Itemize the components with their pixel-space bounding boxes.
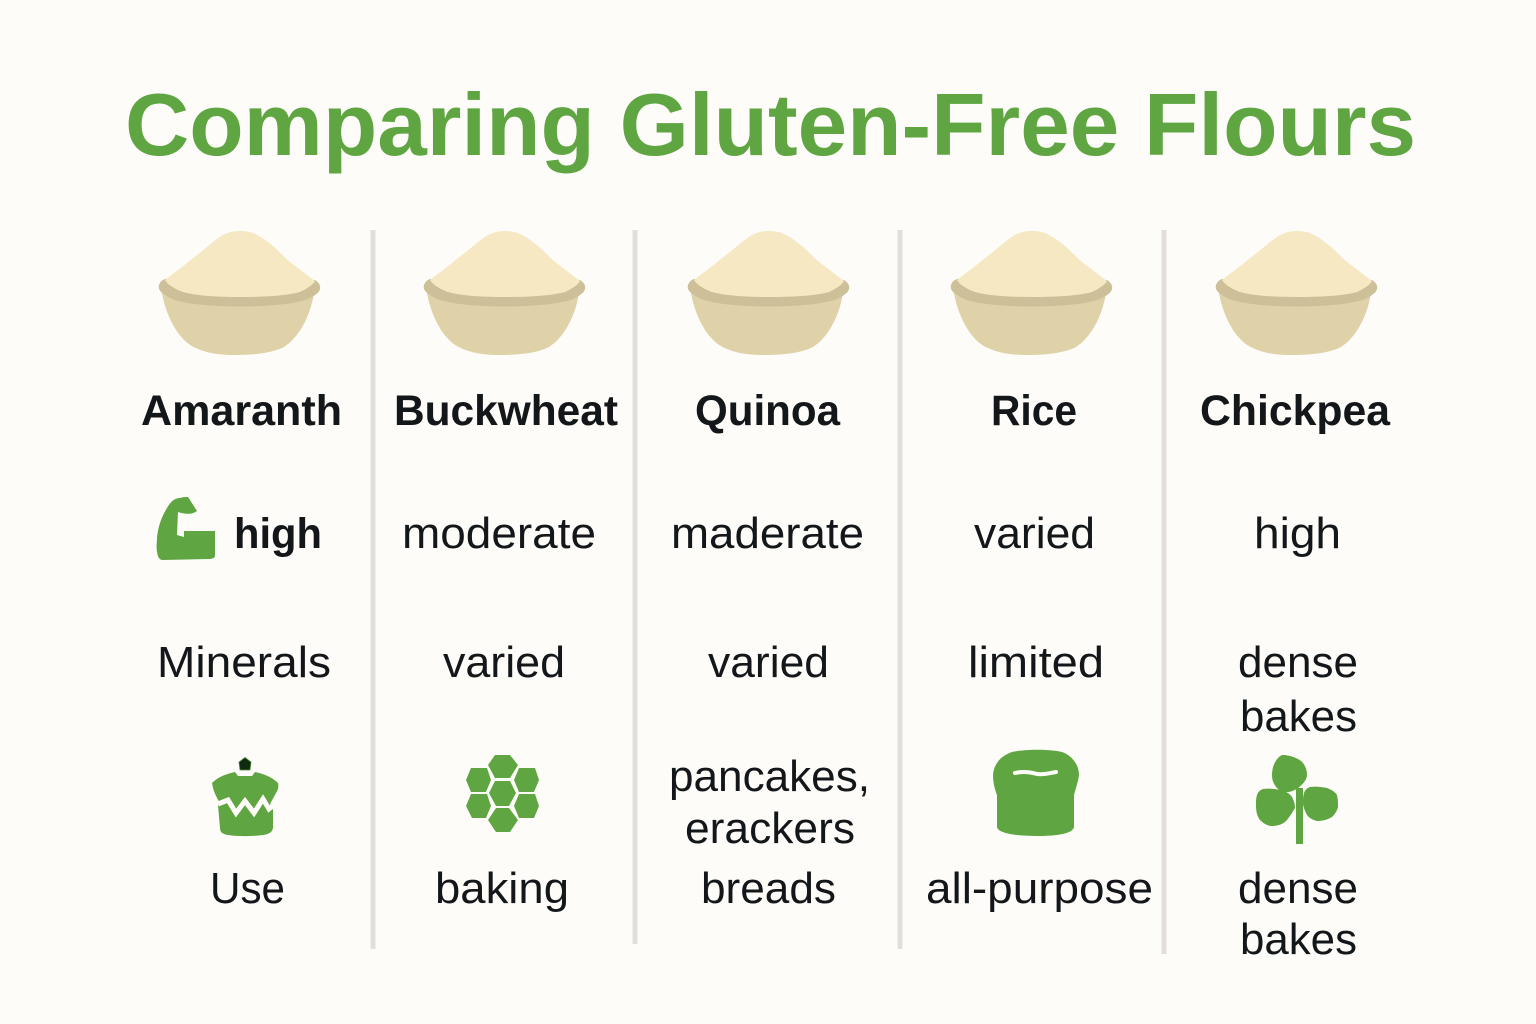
icon: flour bowl (951, 231, 1112, 355)
icon: clover (1256, 755, 1338, 844)
text: pancakes, erackers: erackers (685, 804, 855, 853)
icon: bread loaf (993, 750, 1079, 836)
text: baking: baking (435, 864, 569, 913)
heading: Rice: Rice (991, 387, 1077, 435)
text: dense bakes (1238, 864, 1358, 964)
text: dense bakes: dense (1238, 638, 1358, 687)
icon: flour bowl (159, 231, 320, 355)
text: varied: varied (443, 638, 565, 687)
heading: Amaranth: Amaranth (141, 387, 342, 435)
text: all-purpose: all-purpose (926, 864, 1153, 913)
text: varied: varied (708, 638, 829, 687)
text: dense bakes (1238, 638, 1358, 741)
text: dense bakes: dense (1238, 864, 1358, 913)
panel: Rice column (926, 231, 1153, 913)
icon: flour bowl (1216, 231, 1377, 355)
icon: honeycomb (466, 755, 539, 832)
icon: flour bowl (688, 231, 849, 355)
heading: Quinoa: Quinoa (695, 387, 841, 435)
text: limited: limited (968, 638, 1104, 687)
panel: Buckwheat column (394, 231, 618, 913)
text: Minerals: Minerals (157, 638, 331, 687)
text: moderate: moderate (402, 509, 596, 558)
icon: flour bowl (424, 231, 585, 355)
panel: Quinoa column (669, 231, 870, 913)
panel: Amaranth column (141, 231, 342, 913)
text: dense bakes: bakes (1240, 915, 1357, 964)
heading: Chickpea: Chickpea (1200, 387, 1391, 435)
text: pancakes, erackers: pancakes, (669, 752, 870, 801)
icon: flexed arm (157, 497, 215, 560)
text: Use: Use (210, 864, 285, 913)
text: dense bakes: bakes (1240, 692, 1357, 741)
panel: Chickpea column (1200, 231, 1391, 964)
heading: Buckwheat: Buckwheat (394, 387, 618, 435)
text: varied: varied (974, 509, 1095, 558)
text: high: high (1254, 509, 1341, 558)
text: protein high: high (234, 510, 322, 558)
icon: cupcake (212, 758, 278, 836)
text: pancakes, erackers (669, 752, 870, 853)
title: Comparing Gluten-Free Flours (125, 75, 1416, 174)
text: breads: breads (701, 864, 836, 913)
text: maderate: maderate (671, 509, 864, 558)
